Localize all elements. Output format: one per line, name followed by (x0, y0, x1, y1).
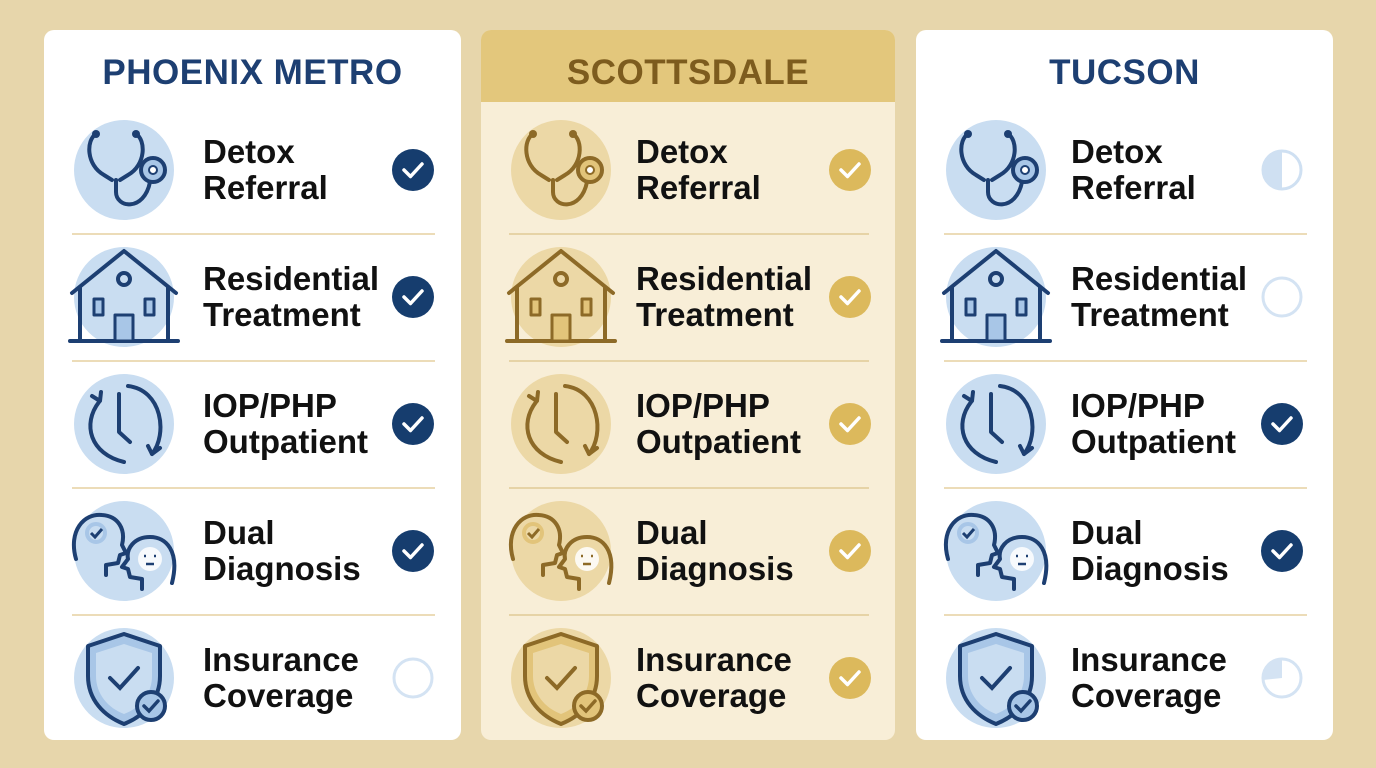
row: Insurance Coverage: Coverage (1071, 677, 1221, 714)
row: Dual Diagnosis (72, 501, 434, 601)
row: Insurance Coverage (74, 628, 434, 728)
row: IOP/PHP Outpatient (946, 374, 1303, 474)
row: Dual Diagnosis (508, 501, 871, 601)
row: Detox Referral: Detox (1071, 133, 1163, 170)
row: Residential Treatment: Treatment (636, 296, 794, 333)
panel: Phoenix Metro (44, 30, 461, 740)
row: IOP/PHP Outpatient: IOP/PHP (203, 387, 337, 424)
row: IOP/PHP Outpatient: IOP/PHP (636, 387, 770, 424)
row: Insurance Coverage: Coverage (203, 677, 353, 714)
row: IOP/PHP Outpatient: Outpatient (1071, 423, 1236, 460)
row: Insurance Coverage (946, 628, 1302, 728)
row: Dual Diagnosis: Dual (636, 514, 708, 551)
row: Detox Referral: Referral (1071, 169, 1196, 206)
row: Detox Referral: Referral (636, 169, 761, 206)
row: IOP/PHP Outpatient (511, 374, 871, 474)
heading: Scottsdale: SCOTTSDALE (567, 53, 809, 92)
row: Residential Treatment: Treatment (1071, 296, 1229, 333)
row: Detox Referral: Referral (203, 169, 328, 206)
row: Insurance Coverage: Coverage (636, 677, 786, 714)
row: Insurance Coverage (511, 628, 871, 728)
row: Dual Diagnosis (944, 501, 1303, 601)
row: Dual Diagnosis: Dual (1071, 514, 1143, 551)
row: Residential Treatment: Residential (636, 260, 812, 297)
row: Dual Diagnosis: Diagnosis (1071, 550, 1229, 587)
row: Dual Diagnosis: Dual (203, 514, 275, 551)
row: Dual Diagnosis: Diagnosis (636, 550, 794, 587)
row: Detox Referral (511, 120, 871, 220)
row: Detox Referral: Detox (203, 133, 295, 170)
row: Residential Treatment (505, 247, 871, 347)
row: IOP/PHP Outpatient: IOP/PHP (1071, 387, 1205, 424)
row: Insurance Coverage: Insurance (636, 641, 792, 678)
row: IOP/PHP Outpatient (74, 374, 434, 474)
heading: Phoenix Metro: PHOENIX METRO (102, 53, 403, 92)
row: Insurance Coverage: Insurance (1071, 641, 1227, 678)
row: Dual Diagnosis: Diagnosis (203, 550, 361, 587)
panel: Scottsdale (481, 30, 895, 740)
row: IOP/PHP Outpatient: Outpatient (203, 423, 368, 460)
row: Detox Referral (946, 120, 1302, 220)
row: Residential Treatment: Residential (203, 260, 379, 297)
row: Detox Referral (74, 120, 434, 220)
row: Residential Treatment: Residential (1071, 260, 1247, 297)
heading: Tucson: TUCSON (1049, 53, 1200, 92)
row: IOP/PHP Outpatient: Outpatient (636, 423, 801, 460)
row: Residential Treatment (68, 247, 434, 347)
panel: Tucson (916, 30, 1333, 740)
row: Insurance Coverage: Insurance (203, 641, 359, 678)
row: Residential Treatment (940, 247, 1302, 347)
row: Detox Referral: Detox (636, 133, 728, 170)
row: Residential Treatment: Treatment (203, 296, 361, 333)
